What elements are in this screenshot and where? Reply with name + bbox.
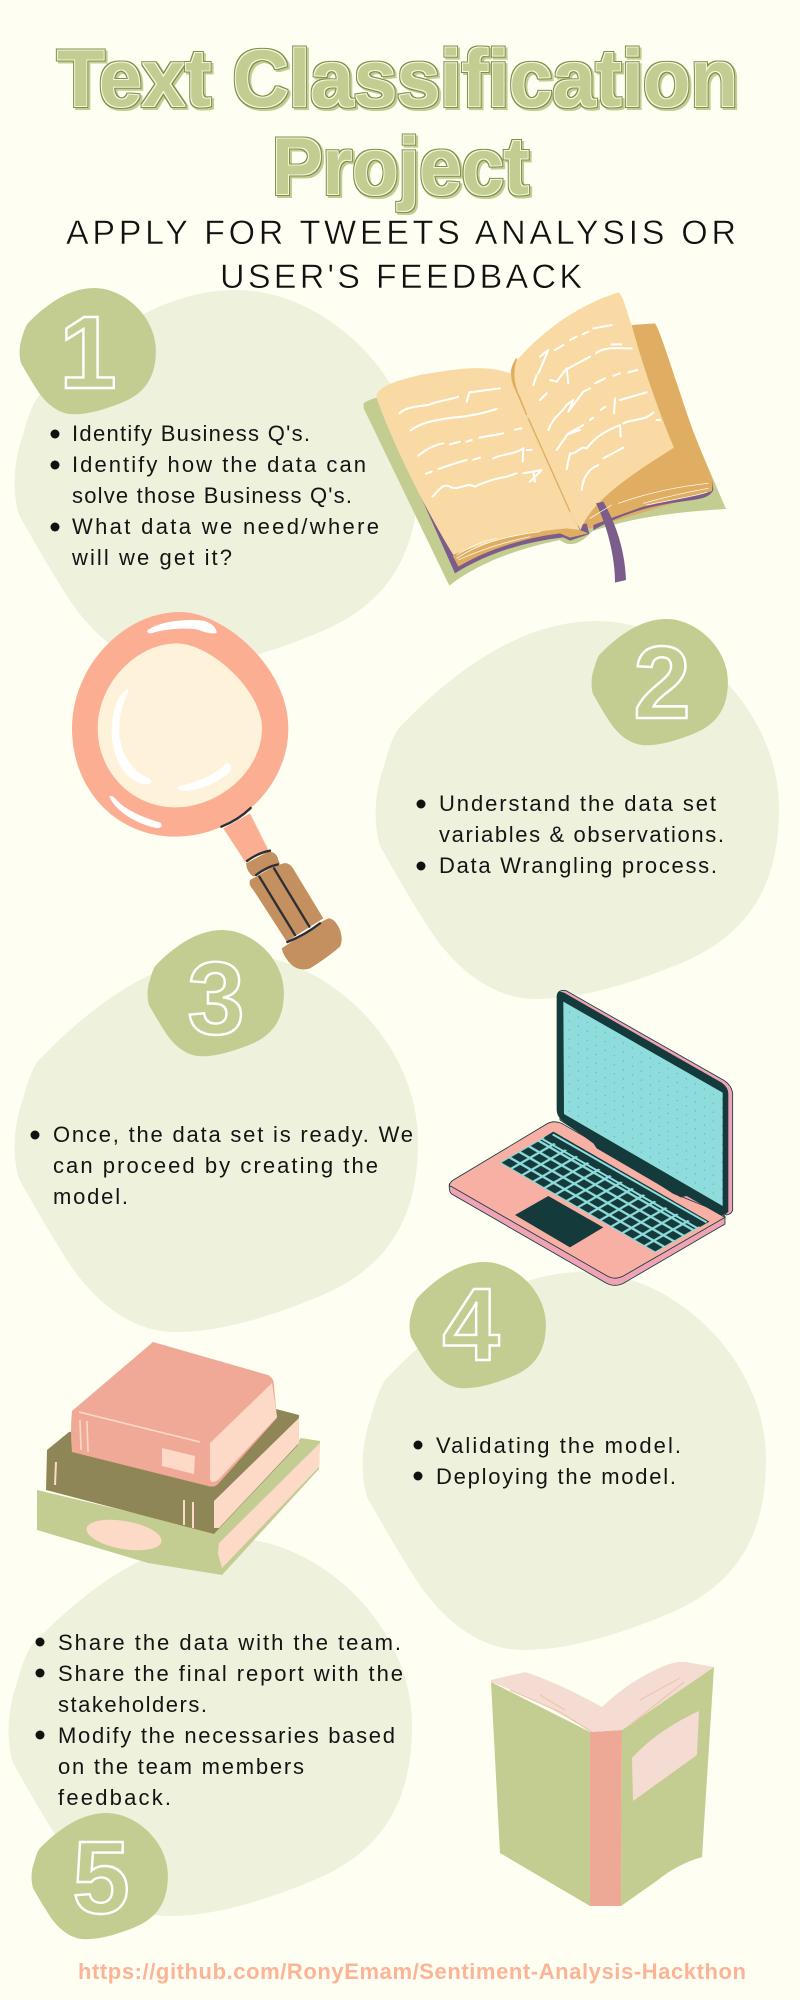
step 1 bullet list: will we get it? (71, 545, 232, 570)
middle book (46, 1409, 299, 1534)
step 5 bullet list: on the team members (58, 1754, 304, 1779)
step 2 number badge: 2 (633, 625, 691, 740)
bottom book (37, 1438, 320, 1575)
panel: step 5 (9, 1538, 412, 1939)
step 3 bullet list: Once, the data set is ready. We (53, 1122, 413, 1147)
touchpad (515, 1196, 603, 1247)
subtitle: USER'S FEEDBACK (220, 258, 582, 296)
step 5 number badge: 5 (72, 1820, 130, 1935)
step 4 bullet list (414, 1433, 681, 1489)
step 1 background blob (15, 290, 418, 668)
panel: step 3 (15, 930, 418, 1332)
subtitle: APPLY FOR TWEETS ANALYSIS OR (66, 214, 736, 252)
laptop base (449, 1122, 725, 1285)
handle neck (223, 813, 268, 862)
step 1 bullet list: solve those Business Q's. (72, 483, 352, 508)
screen (557, 990, 733, 1215)
cover label (632, 1711, 699, 1801)
subtitle (66, 214, 736, 296)
step 1 bullet list: Identify Business Q's. (72, 421, 310, 446)
step 5 bullet list: Share the final report with the (58, 1661, 403, 1686)
step 5 bullet list: feedback. (58, 1785, 171, 1810)
icon: open book with bookmark (363, 292, 726, 586)
step 2 background blob (376, 621, 779, 999)
icon: standing book (491, 1662, 714, 1906)
step 5 number badge (32, 1813, 168, 1939)
left cover (491, 1682, 590, 1906)
keyboard (499, 1132, 709, 1253)
step 3 bullet list (30, 1122, 413, 1209)
step 3 bullet list: can proceed by creating the (53, 1153, 378, 1178)
title (57, 34, 738, 212)
step 1 number badge: 1 (59, 295, 117, 410)
step 2 number badge (592, 619, 728, 745)
lens ring (72, 612, 288, 837)
lens highlights (109, 620, 231, 828)
handle (246, 852, 342, 969)
step 5 bullet list (36, 1630, 403, 1810)
step 4 number badge (410, 1262, 546, 1388)
step 5 bullet list: stakeholders. (58, 1692, 207, 1717)
step 5 bullet list: Share the data with the team. (58, 1630, 401, 1655)
step 4 background blob (363, 1272, 766, 1650)
icon: laptop (449, 990, 733, 1285)
step 3 number badge: 3 (187, 941, 245, 1056)
step 1 number badge (20, 288, 156, 414)
step 1 bullet list: Identify how the data can (72, 452, 366, 477)
step 3 bullet list: model. (53, 1184, 128, 1209)
step 1 bullet list (50, 421, 379, 570)
icon: magnifying glass (72, 612, 342, 969)
source link: https://github.com/RonyEmam/Sentiment-Analysis-Hackthon (78, 1959, 746, 1984)
title: Text Classification (57, 34, 738, 124)
spine (590, 1730, 622, 1906)
panel: step 4 (363, 1262, 766, 1650)
step 4 number badge: 4 (442, 1267, 500, 1382)
title: Project (272, 122, 529, 212)
right cover (621, 1667, 714, 1906)
step 2 bullet list (416, 791, 724, 878)
step 3 number badge (148, 930, 284, 1056)
step 4 bullet list: Validating the model. (436, 1433, 681, 1458)
step 3 background blob (15, 954, 418, 1332)
step 1 bullet list: What data we need/where (72, 514, 379, 539)
step 5 bullet list: Modify the necessaries based (58, 1723, 395, 1748)
step 4 bullet list: Deploying the model. (436, 1464, 676, 1489)
panel: step 1 (15, 288, 418, 668)
lens glass (98, 643, 262, 807)
step 5 background blob (9, 1538, 412, 1916)
step 2 bullet list: variables & observations. (439, 822, 724, 847)
step 2 bullet list: Data Wrangling process. (439, 853, 717, 878)
step 2 bullet list: Understand the data set (439, 791, 716, 816)
icon: stack of books (37, 1342, 320, 1575)
pages (491, 1662, 714, 1732)
panel: step 2 (376, 619, 779, 999)
top book (71, 1342, 277, 1487)
